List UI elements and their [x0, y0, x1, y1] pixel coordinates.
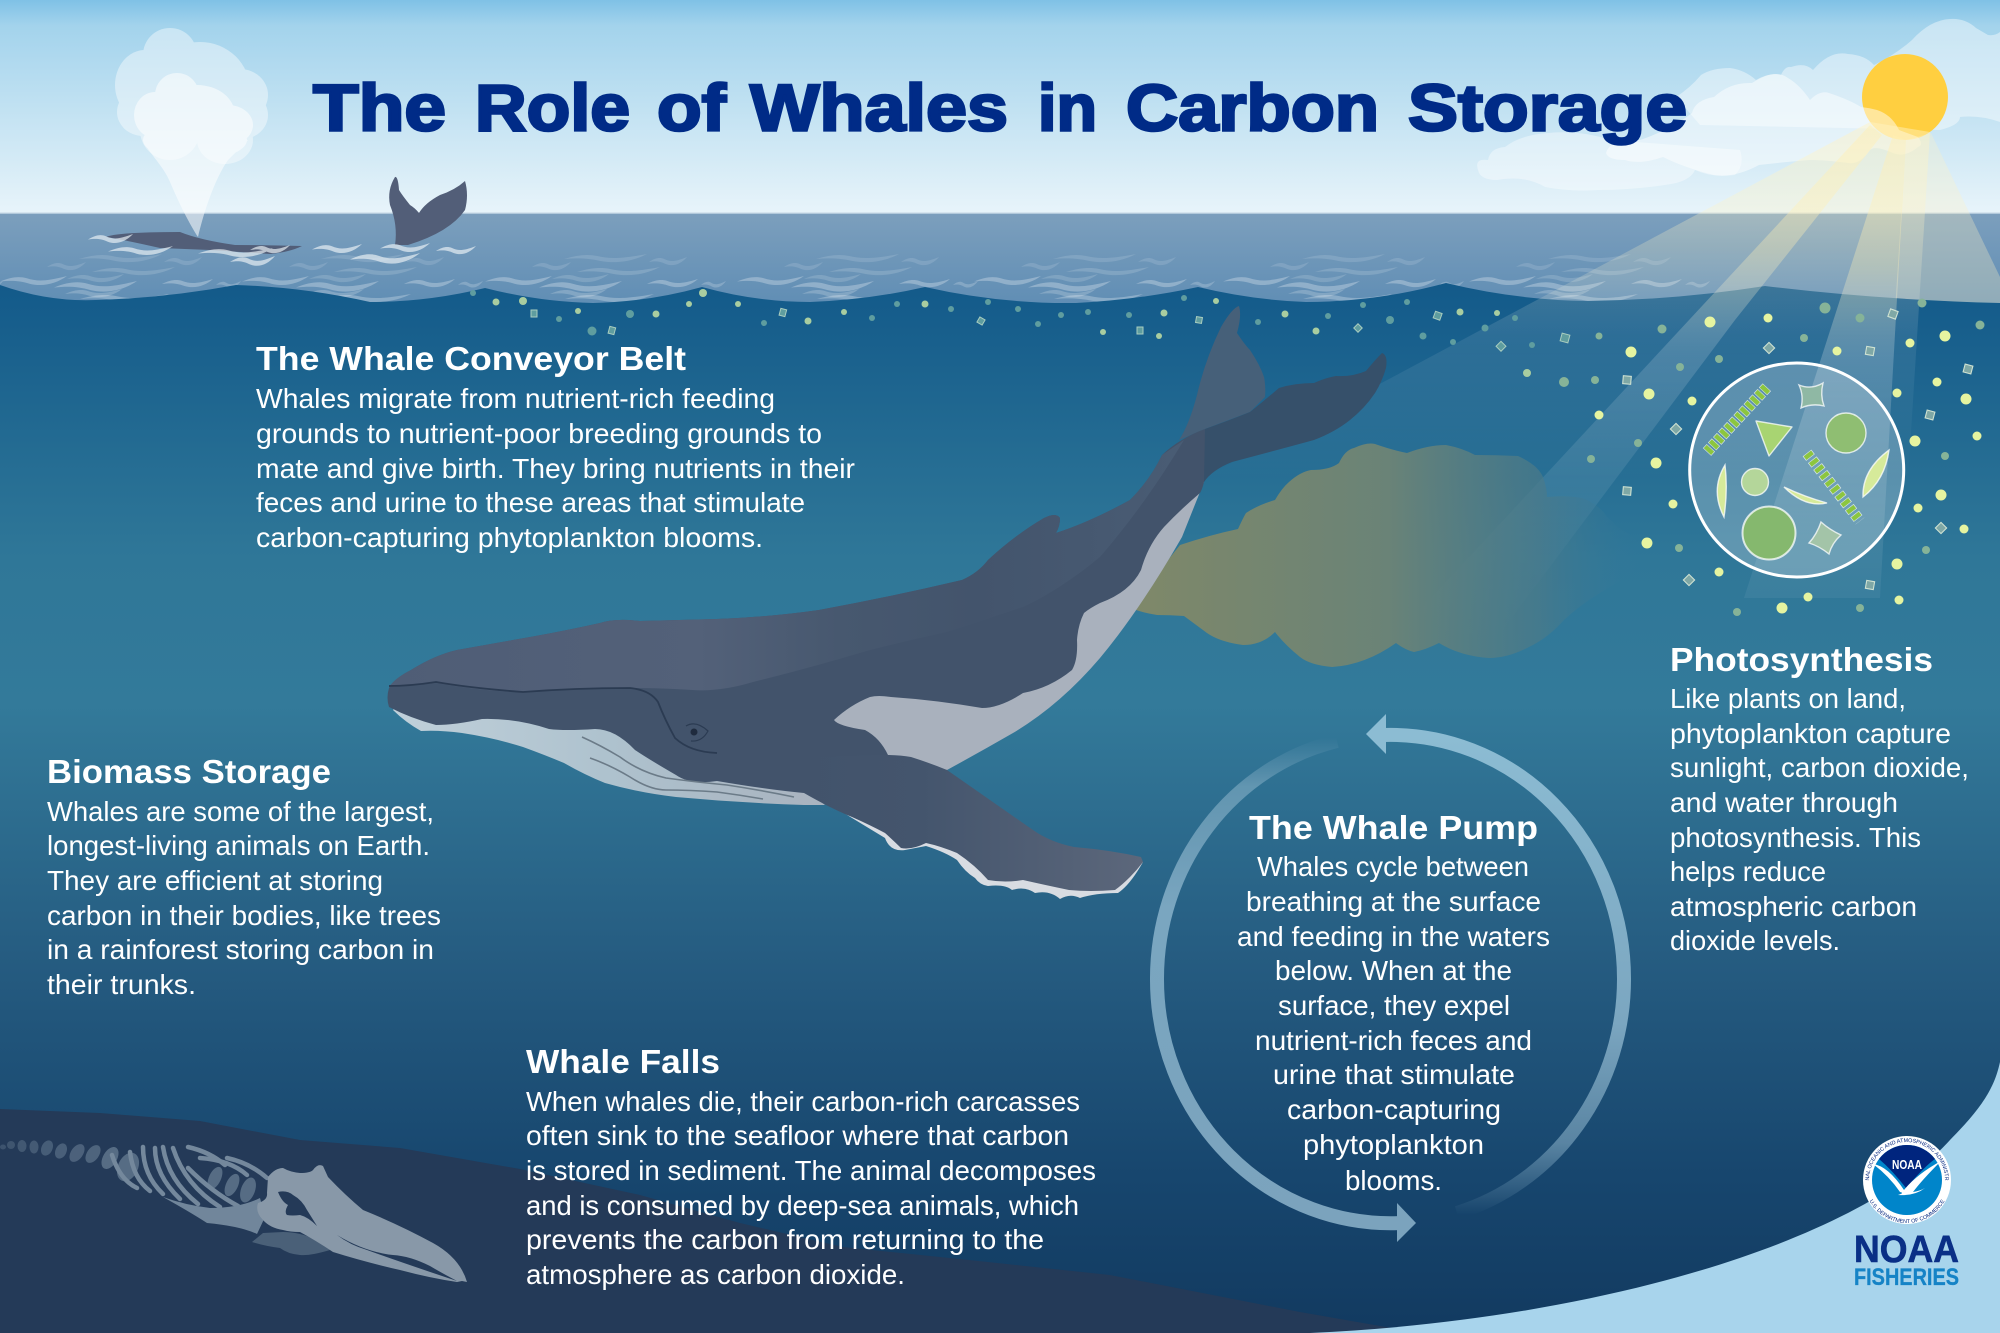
ribs: [112, 1147, 267, 1207]
body text: Whales are some of the largest,: [47, 796, 434, 827]
title: Role: [475, 70, 630, 144]
front cloud low: [1477, 132, 1742, 191]
body text: [526, 1086, 1096, 1290]
surface ripples: [0, 254, 1710, 302]
body text: nutrient-rich feces and: [1255, 1025, 1532, 1056]
center ray: [1744, 135, 1906, 598]
lower jaw shadow: [252, 1232, 330, 1255]
body text: carbon in their bodies, like trees: [47, 900, 441, 931]
far fluke: [1179, 306, 1265, 440]
title: The: [313, 70, 446, 144]
text block: whale falls: [526, 1043, 1096, 1290]
body text: atmosphere as carbon dioxide.: [526, 1259, 905, 1290]
pectoral fin: [804, 755, 1143, 891]
right sunlight ray above water: [1895, 133, 2000, 310]
light belly: [800, 482, 1204, 780]
body text: [1670, 683, 1969, 956]
body text: their trunks.: [47, 969, 196, 1000]
text block: whale conveyor belt: [256, 340, 855, 553]
lighter upper body: [389, 440, 1184, 692]
body text: in a rainforest storing carbon in: [47, 934, 434, 965]
whale waste plume: [1136, 444, 1660, 667]
body text: They are efficient at storing: [47, 865, 383, 896]
front cloud high: [1606, 74, 1921, 176]
body text: and is consumed by deep-sea animals, which: [526, 1190, 1079, 1221]
heading: Photosynthesis: [1670, 641, 1933, 678]
sun: [1862, 54, 1948, 140]
body text: dioxide levels.: [1670, 925, 1840, 956]
title: Carbon: [1126, 70, 1379, 144]
skull eye socket: [278, 1191, 317, 1226]
ocean water body: [0, 283, 2000, 1333]
back cloud: [1676, 19, 2000, 130]
body text: longest-living animals on Earth.: [47, 830, 430, 861]
right arc with top arrowhead: [1366, 714, 1624, 1213]
outer spray cloud: [115, 28, 268, 164]
body text: is stored in sediment. The animal decomposes: [526, 1155, 1096, 1186]
heading: The Whale Pump: [1249, 809, 1538, 846]
sky background: [0, 0, 2000, 214]
pale blue corner curve: [1310, 1062, 2000, 1333]
heading: Biomass Storage: [47, 753, 331, 790]
body text: prevents the carbon from returning to the: [526, 1224, 1044, 1255]
title: in: [1038, 70, 1097, 144]
body text: phytoplankton: [1303, 1129, 1484, 1160]
body text: [256, 383, 855, 553]
title: of: [657, 70, 727, 144]
vertebrae: [0, 1138, 259, 1205]
body text: grounds to nutrient-poor breeding grounds to: [256, 418, 822, 449]
body text: below. When at the: [1275, 955, 1512, 986]
body text: Whales cycle between: [1257, 851, 1529, 882]
sea surface band: [0, 213, 2000, 308]
text block: whale pump: [1237, 809, 1550, 1196]
sunlight rays: [1200, 122, 1930, 660]
body text: carbon-capturing phytoplankton blooms.: [256, 522, 763, 553]
NOAA wordmark: NOAA: [1854, 1229, 1959, 1271]
Fisheries wordmark: FISHERIES: [1854, 1264, 1959, 1291]
body text: [47, 796, 441, 1000]
body text: carbon-capturing: [1287, 1094, 1501, 1125]
whale eye: [686, 724, 708, 741]
heading: Whale Falls: [526, 1043, 720, 1080]
NOAA seal: NOAA: [1892, 1158, 1922, 1172]
NOAA seal: U.S. DEPARTMENT OF COMMERCE: [1870, 1199, 1944, 1223]
dark whale body: [388, 429, 1205, 793]
throat grooves: [582, 737, 794, 799]
pale throat: [393, 700, 825, 805]
whale pump circular arrows: [1157, 714, 1624, 1242]
jaw slit: [337, 1235, 457, 1281]
body text: When whales die, their carbon-rich carcasses: [526, 1086, 1080, 1117]
phytoplankton dots near surface: [470, 289, 1984, 616]
body text: feces and urine to these areas that stimulate: [256, 487, 805, 518]
surface whale with blowhole: [106, 232, 302, 254]
body text: photosynthesis. This: [1670, 822, 1921, 853]
whale skeleton: [0, 1138, 467, 1282]
plankton cells: [1717, 383, 1889, 560]
body text: mate and give birth. They bring nutrients in their: [256, 453, 855, 484]
body text: surface, they expel: [1278, 990, 1510, 1021]
body text: breathing at the surface: [1246, 886, 1541, 917]
skull: [257, 1165, 467, 1282]
body text: sunlight, carbon dioxide,: [1670, 752, 1969, 783]
body text: phytoplankton capture: [1670, 718, 1951, 749]
title: Storage: [1408, 70, 1687, 144]
plankton magnified circle: [1690, 363, 1904, 577]
inner spray cloud: [134, 73, 253, 237]
mouth line: [389, 682, 717, 753]
body text: helps reduce: [1670, 856, 1826, 887]
body text: Whales migrate from nutrient-rich feeding: [256, 383, 775, 414]
wide ray: [1200, 122, 1930, 480]
body text: urine that stimulate: [1273, 1059, 1515, 1090]
left arc with bottom arrowhead: [1157, 741, 1416, 1242]
title: Whales: [750, 70, 1008, 144]
body text: and water through: [1670, 787, 1898, 818]
heading: The Whale Conveyor Belt: [256, 340, 686, 377]
body text: atmospheric carbon: [1670, 891, 1917, 922]
body text: blooms.: [1345, 1165, 1442, 1196]
body text: Like plants on land,: [1670, 683, 1906, 714]
white foam around whales: [88, 234, 476, 266]
text block: photosynthesis: [1670, 641, 1969, 956]
humpback whale: [388, 306, 1386, 899]
text block: biomass storage: [47, 753, 441, 1000]
title: [313, 70, 1687, 144]
narrow left ray: [1420, 125, 1882, 660]
body text: [1237, 851, 1550, 1196]
seafloor: [0, 1109, 1420, 1333]
diving whale tail: [389, 177, 467, 245]
rear jaw plate: [163, 1197, 265, 1234]
whale blow plume: [115, 28, 268, 237]
body text: and feeding in the waters: [1237, 921, 1550, 952]
body text: often sink to the seafloor where that carbon: [526, 1120, 1069, 1151]
fin light edge: [815, 795, 1143, 899]
near fluke: [1203, 353, 1386, 482]
NOAA seal: NATIONAL OCEANIC AND ATMOSPHERIC ADMINISTRATION: [1865, 1138, 1949, 1180]
diatom chains: [1707, 386, 1768, 452]
